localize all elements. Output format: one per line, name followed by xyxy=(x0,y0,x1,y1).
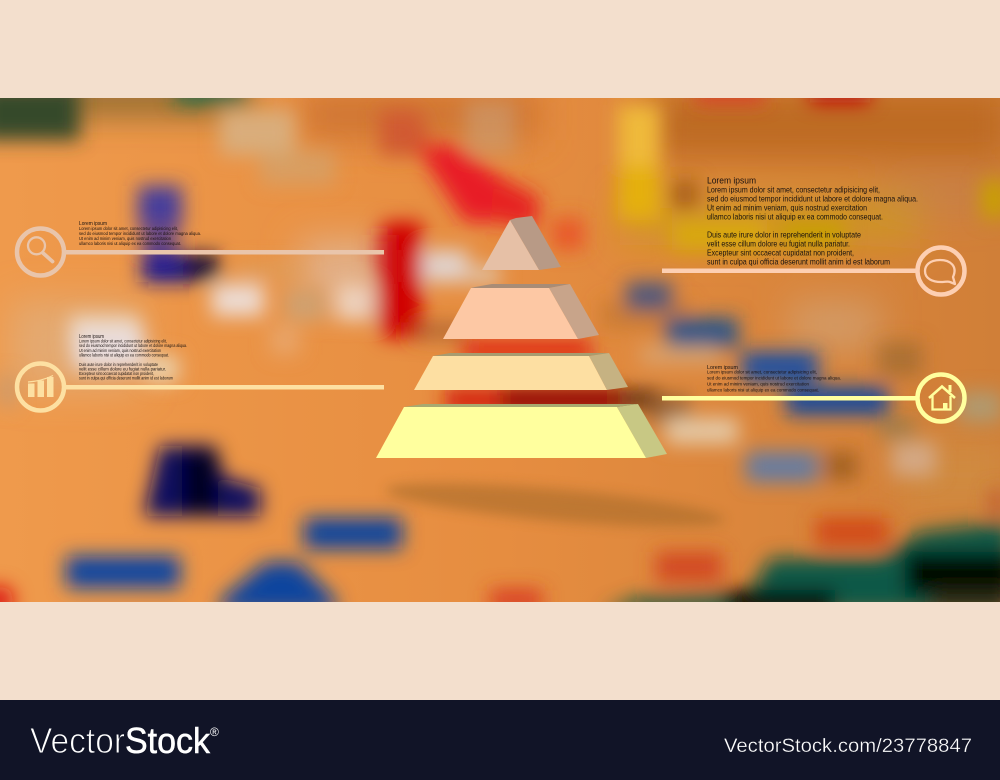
icon: speech bubble xyxy=(918,248,964,294)
text: top left: sed do eiusmod tempor incididunt ut labore et dolore magna aliqua. xyxy=(79,231,201,236)
text: bottom right: ullamco laboris nisi ut aliquip ex ea commodo consequat. xyxy=(707,388,819,392)
callout: bottom left chart xyxy=(17,334,384,410)
pyramid xyxy=(376,216,667,458)
text: bottom left: Duis aute irure dolor in reprehenderit in voluptate xyxy=(79,362,159,367)
bottom band xyxy=(0,602,1000,700)
text: top right: sed do eiusmod tempor incididunt ut labore et dolore magna aliqua. xyxy=(707,194,918,204)
text: bottom right: sed do eiusmod tempor incididunt ut labore et dolore magna aliqua. xyxy=(707,376,841,381)
text: top right: Duis aute irure dolor in reprehenderit in voluptate xyxy=(707,230,861,240)
text: top right: Lorem ipsum dolor sit amet, consectetur adipisicing elit, xyxy=(707,184,880,194)
text: bottom right: Ut enim ad minim veniam, quis nostrud exercitation xyxy=(707,382,809,387)
text: top right: sunt in culpa qui officia deserunt mollit anim id est laborum xyxy=(707,256,890,266)
text: bottom right xyxy=(707,365,841,392)
callout: top right speech xyxy=(662,176,964,294)
connector line xyxy=(66,250,384,254)
text: bottom left: velit esse cillum dolore eu fugiat nulla pariatur. xyxy=(79,366,166,371)
text: bottom left xyxy=(79,334,187,381)
text: top right xyxy=(707,176,918,266)
pyramid tier 1 xyxy=(482,216,561,270)
text: top left: Lorem ipsum xyxy=(79,221,107,227)
text: bottom left: Ut enim ad minim veniam, quis nostrud exercitation xyxy=(79,348,162,353)
pyramid shadow xyxy=(384,474,726,536)
text: bottom left: Excepteur sint occaecat cupidatat non proident, xyxy=(79,371,154,376)
text: top left: ullamco laboris nisi ut aliquip ex ea commodo consequat. xyxy=(79,241,181,246)
connector line xyxy=(662,268,917,273)
image id: VectorStock.com/23778847 xyxy=(724,736,972,757)
logo: ® xyxy=(210,725,219,739)
text: top right: Excepteur sint occaecat cupidatat non proident, xyxy=(707,248,854,258)
blurred photo background xyxy=(0,85,1000,614)
text: bottom left: Lorem ipsum dolor sit amet, consectetur adipisicing elit, xyxy=(79,338,167,344)
text: top right: ullamco laboris nisi ut aliquip ex ea commodo consequat. xyxy=(707,212,883,222)
pyramid tier 3 xyxy=(414,353,628,390)
text: top right: Lorem ipsum xyxy=(707,176,756,186)
logo xyxy=(30,720,219,761)
text: bottom right: Lorem ipsum dolor sit amet, consectetur adipisicing elit, xyxy=(707,370,817,375)
icon: house xyxy=(918,374,964,422)
icon: bar chart xyxy=(17,364,64,410)
text: top right: velit esse cillum dolore eu fugiat nulla pariatur. xyxy=(707,238,850,248)
top band xyxy=(0,0,1000,98)
text: top right: Ut enim ad minim veniam, quis nostrud exercitation xyxy=(707,202,867,212)
icon: magnifier xyxy=(17,228,64,276)
text: top left: Ut enim ad minim veniam, quis nostrud exercitation xyxy=(79,236,171,241)
text: top left xyxy=(79,221,201,246)
text: bottom left: Lorem ipsum xyxy=(79,334,104,340)
text: top left: Lorem ipsum dolor sit amet, consectetur adipisicing elit, xyxy=(79,226,178,231)
logo: Stock xyxy=(125,720,211,761)
connector line xyxy=(662,396,917,400)
text: bottom left: sed do eiusmod tempor incididunt ut labore et dolore magna aliqua. xyxy=(79,343,187,348)
blobs xyxy=(380,110,435,155)
pyramid tier 4 xyxy=(376,404,667,458)
pyramid tier 2 xyxy=(443,284,599,339)
text: bottom left: ullamco laboris nisi ut aliquip ex ea commodo consequat. xyxy=(79,352,169,358)
text: bottom left: sunt in culpa qui officia deserunt mollit anim id est laborum xyxy=(79,376,173,381)
callout: top left search xyxy=(17,221,384,276)
connector line xyxy=(66,385,384,390)
text: bottom right: Lorem ipsum xyxy=(707,365,738,371)
footer bar xyxy=(0,700,1000,780)
callout: bottom right home xyxy=(662,365,964,422)
logo: Vector xyxy=(30,720,125,761)
